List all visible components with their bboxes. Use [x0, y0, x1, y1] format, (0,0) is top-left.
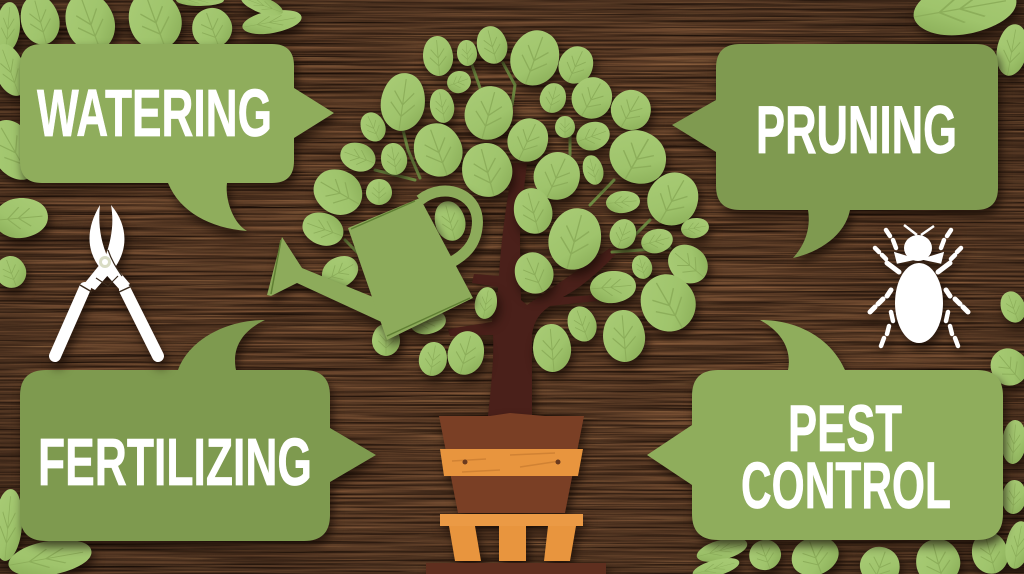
icon: watering can: [267, 191, 477, 340]
wooden stand: [440, 514, 583, 561]
icon: pruning shears: [55, 205, 158, 356]
panel: fertilizing: [20, 320, 376, 541]
base plank: [426, 563, 606, 574]
panel: pest control: [647, 320, 1003, 540]
tree trunk and branches: [448, 163, 616, 416]
wooden band: [440, 449, 583, 476]
panel: watering: [20, 44, 334, 231]
heading: watering: WATERING: [37, 76, 272, 151]
panel: pruning: [672, 44, 998, 258]
corner foliage: top left: [0, 0, 303, 292]
plant pot: [426, 413, 606, 574]
tree stems: [345, 63, 670, 255]
tree foliage: [298, 23, 716, 379]
pot body: [439, 413, 584, 513]
heading: pest control: [741, 391, 951, 522]
corner foliage: bottom right: [691, 519, 1024, 574]
corner foliage: top right: [909, 0, 1024, 78]
heading: pest control: PEST: [788, 391, 902, 465]
heading: fertilizing: FERTILIZING: [38, 425, 312, 500]
icon: beetle: [870, 225, 968, 346]
corner foliage: bottom left: [0, 488, 94, 574]
corner foliage: right edge: [983, 288, 1024, 515]
